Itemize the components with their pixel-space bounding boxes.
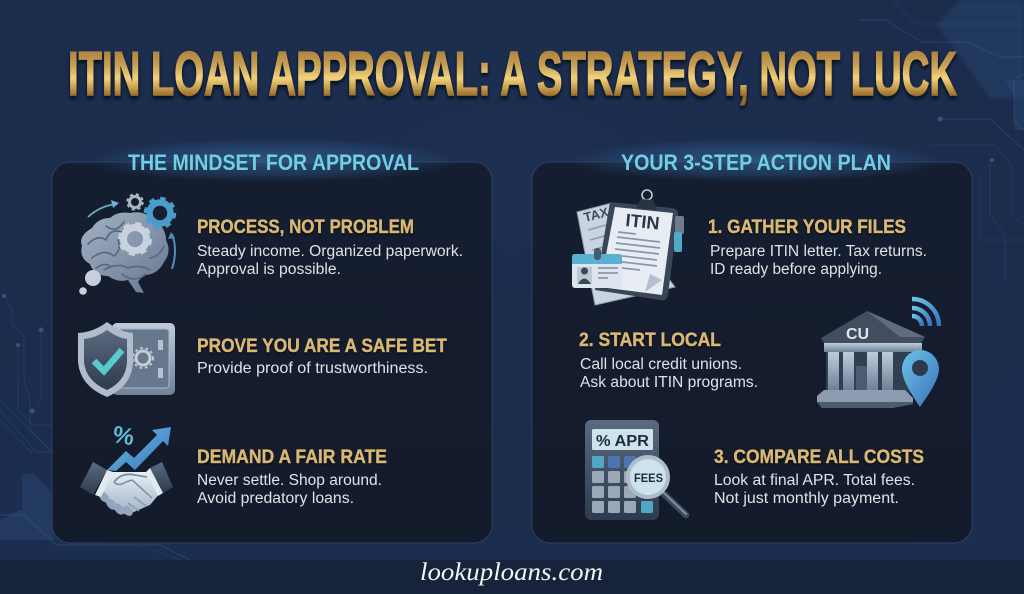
- icon: clipboard with tax form and ID card: ITIN: [625, 210, 660, 234]
- step heading: 1. GATHER YOUR FILES: [708, 217, 906, 238]
- icon: calculator with magnifier: [585, 420, 686, 520]
- icon: calculator with magnifier: % APR: [596, 433, 649, 450]
- icon: credit union bank with pin and signal: [817, 299, 939, 408]
- step heading: 3. COMPARE ALL COSTS: [714, 447, 924, 468]
- icon: clipboard with tax form and ID card: [572, 190, 684, 305]
- step 2: start local: [579, 299, 939, 408]
- icon: handshake with rising arrow: %: [111, 421, 136, 451]
- icon: clipboard with tax form and ID card: TAX: [582, 204, 610, 225]
- step body: Prepare ITIN letter. Tax returns.: [710, 243, 927, 260]
- item: demand a fair rate: [80, 421, 387, 518]
- item body: Never settle. Shop around.: [197, 472, 382, 489]
- step body: Not just monthly payment.: [714, 490, 899, 507]
- step heading: 2. START LOCAL: [579, 330, 721, 351]
- footer website: lookuploans.com: [420, 559, 603, 586]
- icon: brain with gears: [79, 194, 175, 295]
- item body: Avoid predatory loans.: [197, 490, 354, 507]
- step 3: compare all costs: [585, 420, 924, 520]
- item body: Steady income. Organized paperwork.: [197, 243, 463, 260]
- icon: calculator with magnifier: FEES: [634, 473, 663, 485]
- panel heading: THE MINDSET FOR APPROVAL: [128, 150, 419, 175]
- step 1: gather your files: [572, 190, 927, 305]
- step body: Ask about ITIN programs.: [580, 374, 758, 391]
- panel heading glow: [82, 138, 462, 182]
- footer bar: [0, 559, 1024, 594]
- panel: the mindset for approval: [52, 138, 492, 543]
- panel heading glow: [566, 138, 946, 182]
- item heading: DEMAND A FAIR RATE: [197, 447, 387, 468]
- icon: handshake with rising arrow: [80, 421, 173, 518]
- step body: Look at final APR. Total fees.: [714, 472, 915, 489]
- step body: ID ready before applying.: [710, 261, 882, 278]
- item heading: PROCESS, NOT PROBLEM: [197, 217, 414, 238]
- panel background: [532, 162, 972, 543]
- panel heading: YOUR 3-STEP ACTION PLAN: [621, 150, 891, 175]
- item: process, not problem: [79, 194, 463, 295]
- step body: Call local credit unions.: [580, 356, 742, 373]
- icon: shield and safe: [78, 322, 175, 397]
- item heading: PROVE YOU ARE A SAFE BET: [197, 336, 447, 357]
- item: prove you are a safe bet: [78, 322, 447, 397]
- icon: credit union bank with pin and signal: CU: [846, 326, 869, 343]
- panel: your 3-step action plan: [532, 138, 972, 543]
- panel background: [52, 162, 492, 543]
- item body: Provide proof of trustworthiness.: [197, 360, 428, 377]
- item body: Approval is possible.: [197, 261, 341, 278]
